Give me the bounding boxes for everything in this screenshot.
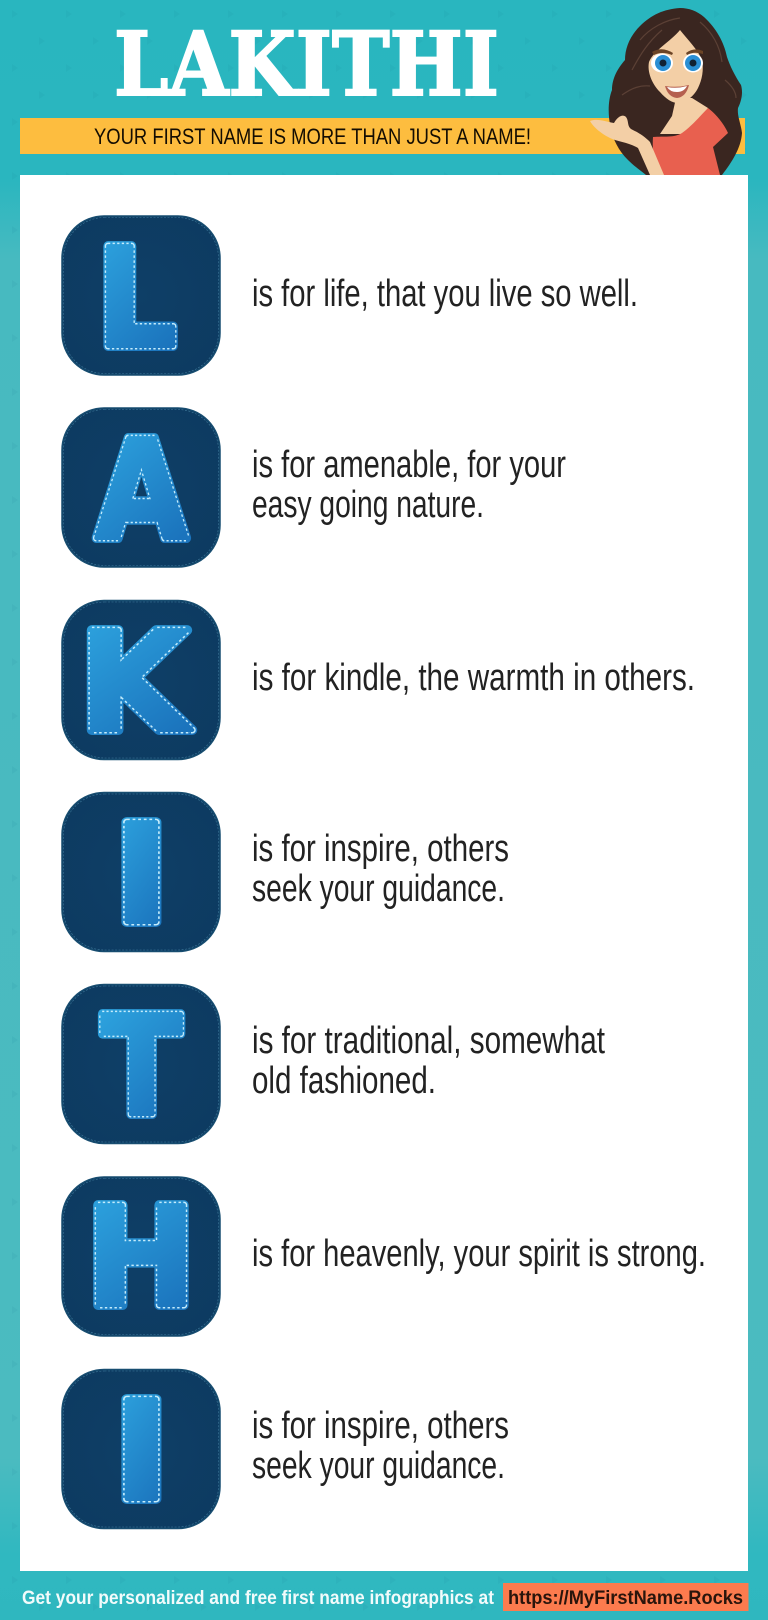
row: H	[62, 1177, 706, 1338]
icon: cartoon woman	[590, 8, 742, 175]
row: L: L	[96, 220, 177, 379]
footer	[22, 1583, 748, 1611]
banner: tagline	[20, 118, 745, 154]
row: K: K	[79, 603, 192, 763]
row: A: A	[95, 412, 187, 571]
row: T	[62, 984, 605, 1147]
row: A: easy going nature.	[252, 484, 484, 526]
row: I: I	[113, 1373, 170, 1532]
row: H: H	[86, 1177, 196, 1338]
row: L: L	[96, 220, 177, 379]
row: T: T	[102, 988, 182, 1147]
row: A: A	[95, 412, 187, 571]
row: T: is for traditional, somewhat	[252, 1020, 605, 1062]
row: H: H	[86, 1177, 196, 1338]
row: I	[62, 1370, 509, 1532]
row: I: seek your guidance.	[252, 868, 505, 910]
footer: https://MyFirstName.Rocks	[508, 1588, 743, 1609]
row: A	[62, 408, 566, 571]
banner: tagline: YOUR FIRST NAME IS MORE THAN JUST A NAME!	[94, 124, 531, 149]
row: I: I	[113, 1373, 170, 1532]
row: H: H	[86, 1177, 196, 1338]
row: L	[62, 216, 638, 379]
row: K	[62, 600, 695, 763]
row: I: I	[113, 796, 170, 955]
row: K: K	[79, 603, 192, 763]
row: I: seek your guidance.	[252, 1445, 505, 1487]
row: K: K	[79, 603, 192, 763]
row: I: I	[113, 796, 170, 955]
row: T: T	[102, 988, 182, 1147]
row: I: is for inspire, others	[252, 828, 509, 870]
row: I: is for inspire, others	[252, 1405, 509, 1447]
row: T: T	[102, 988, 182, 1147]
row: A: A	[95, 412, 187, 571]
row: L: is for life, that you live so well.	[252, 273, 638, 315]
row: I: I	[113, 1373, 170, 1532]
row: A: is for amenable, for your	[252, 444, 566, 486]
row: I: I	[113, 796, 170, 955]
row: I	[62, 792, 509, 955]
footer: Get your personalized and free first name infographics at	[22, 1588, 495, 1609]
row: L: L	[96, 220, 177, 379]
row: T: old fashioned.	[252, 1060, 436, 1102]
title: LAKITHI	[114, 12, 499, 116]
